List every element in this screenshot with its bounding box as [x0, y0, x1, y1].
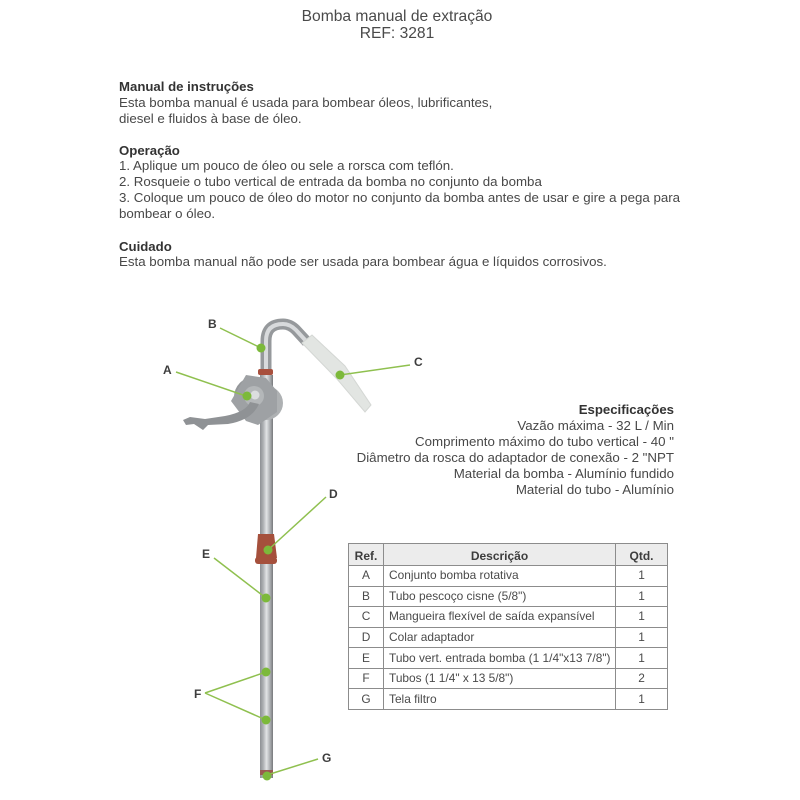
gooseneck tube: [266, 324, 307, 372]
parts table: F: [362, 671, 370, 685]
pump handle: [183, 402, 259, 430]
parts table: D: [362, 630, 370, 644]
adapter collar: [255, 534, 277, 564]
parts table: G: [361, 692, 371, 706]
filter tip: [260, 770, 273, 775]
text block: especificações: [357, 402, 674, 497]
callout F: F: [194, 687, 201, 701]
text block: operação: 1. Aplique um pouco de óleo ou sele a rorsca com teflón.: [119, 158, 454, 173]
parts table: Colar adaptador: [389, 630, 474, 644]
text block: especificações: Material do tubo - Alumínio: [516, 482, 674, 497]
parts table: Tubo pescoço cisne (5/8"): [389, 589, 526, 603]
text block: especificações: Vazão máxima - 32 L / Min: [517, 418, 674, 433]
callout E: E: [202, 547, 210, 561]
parts table: 1: [638, 589, 645, 603]
red ring: [258, 369, 273, 375]
text block: especificações: Material da bomba - Alumínio fundido: [454, 466, 674, 481]
text block: manual de instruções: diesel e fluidos à base de óleo.: [119, 111, 302, 126]
callout C: C: [414, 355, 423, 369]
title: [302, 8, 492, 42]
parts table: Qtd.: [630, 549, 654, 563]
parts table: A: [362, 568, 370, 582]
callout C: [336, 355, 423, 380]
parts table: Conjunto bomba rotativa: [389, 568, 519, 582]
text block: manual de instruções: Manual de instruções: [119, 79, 254, 94]
parts table: 1: [638, 568, 645, 582]
parts table: 2: [638, 671, 645, 685]
parts table: Ref.: [355, 549, 377, 563]
text block: manual de instruções: [119, 79, 492, 126]
text block: cuidado: [119, 238, 607, 269]
parts table: 1: [638, 630, 645, 644]
text block: cuidado: Esta bomba manual não pode ser usada para bombear água e líquidos corrosivos.: [119, 254, 607, 269]
parts table: C: [362, 609, 370, 623]
text block: manual de instruções: Esta bomba manual é usada para bombear óleos, lubrificantes,: [119, 95, 492, 110]
title: REF: 3281: [360, 25, 434, 42]
flexible hose: [302, 335, 371, 412]
text block: operação: bombear o óleo.: [119, 206, 215, 221]
callout E: [202, 547, 270, 602]
callout F: [194, 668, 270, 724]
vertical tube: [260, 375, 273, 778]
parts table: 1: [638, 651, 645, 665]
callout D: [264, 487, 338, 554]
callout G: G: [322, 751, 331, 765]
parts table: Descrição: [471, 549, 528, 563]
text block: cuidado: Cuidado: [119, 238, 172, 254]
parts table: B: [362, 589, 370, 603]
parts table: [348, 543, 668, 710]
parts table: 1: [638, 692, 645, 706]
text block: operação: Operação: [119, 142, 180, 158]
parts table: 1: [638, 609, 645, 623]
text block: operação: 3. Coloque um pouco de óleo do motor no conjunto da bomba antes de usar e gire a pega para: [119, 190, 680, 205]
pump body: [231, 375, 283, 425]
parts table: E: [362, 651, 370, 665]
text block: especificações: Especificações: [579, 402, 674, 417]
callout G: [262, 751, 331, 780]
title: Bomba manual de extração: [302, 8, 492, 25]
callout A: A: [163, 363, 172, 377]
parts table: Tubos (1 1/4" x 13 5/8"): [389, 671, 513, 685]
text block: especificações: Comprimento máximo do tubo vertical - 40 ": [415, 434, 674, 449]
parts table: Tubo vert. entrada bomba (1 1/4"x13 7/8"): [389, 651, 610, 665]
callout B: B: [208, 317, 217, 331]
parts table: Mangueira flexível de saída expansível: [389, 609, 595, 623]
callout B: [208, 317, 266, 352]
text block: operação: 2. Rosqueie o tubo vertical de entrada da bomba no conjunto da bomba: [119, 174, 542, 189]
callout A: [163, 363, 252, 400]
callout D: D: [329, 487, 338, 501]
text block: especificações: Diâmetro da rosca do adaptador de conexão - 2 "NPT: [357, 450, 674, 465]
text block: operação: [119, 142, 680, 221]
parts table: Tela filtro: [389, 692, 437, 706]
